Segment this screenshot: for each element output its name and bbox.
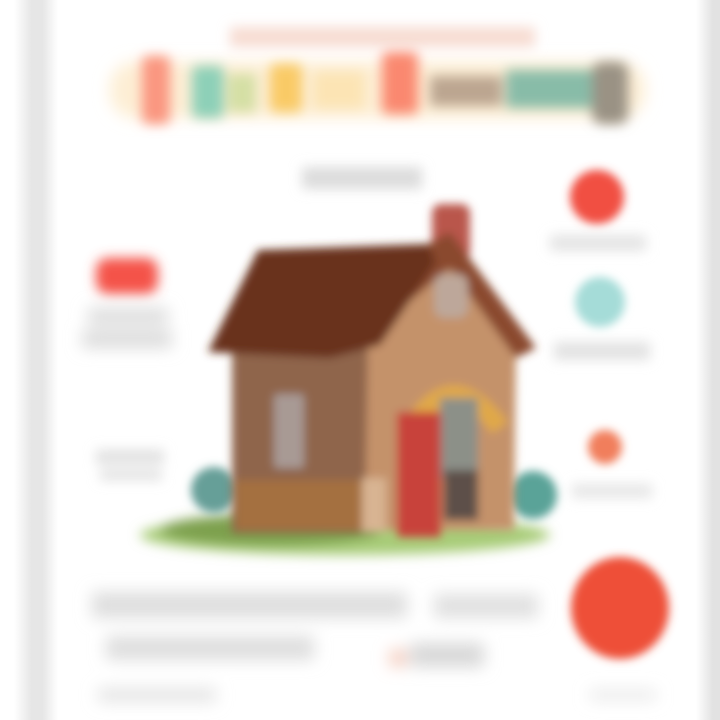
- orange icon: [588, 430, 622, 464]
- subtitle strip: [230, 27, 535, 47]
- bottom text block: [92, 592, 656, 702]
- house illustration: [140, 204, 557, 555]
- grass: [140, 514, 550, 555]
- title banner: [110, 27, 645, 124]
- pale step: [362, 478, 386, 532]
- callout text: [572, 484, 652, 498]
- title halo: [110, 62, 645, 118]
- callout: right middle: [554, 277, 650, 360]
- front wall: [365, 250, 516, 530]
- callout text: [554, 342, 650, 360]
- callout text: [82, 308, 172, 348]
- callout: right lower: [572, 430, 652, 498]
- lower wall warm patch: [236, 480, 370, 530]
- callout text: [550, 235, 646, 251]
- title letters: [142, 52, 628, 124]
- main roof: [208, 244, 436, 358]
- teal circle icon: [575, 277, 625, 327]
- side wall: [232, 345, 374, 533]
- right page edge strip: [696, 0, 720, 720]
- callout: right top: [550, 170, 646, 251]
- callout: left bottom text: [96, 450, 164, 480]
- bushes: [191, 467, 557, 519]
- door arch: [412, 395, 500, 428]
- large red badge: [571, 557, 669, 659]
- red badge: [96, 258, 158, 294]
- heading bar above house: [302, 167, 422, 189]
- side window: [274, 394, 304, 468]
- gable window: [434, 274, 468, 318]
- left page edge strip: [14, 0, 58, 720]
- front gable roof: [405, 232, 536, 358]
- chimney: [432, 204, 470, 260]
- red circle icon: [570, 170, 624, 224]
- red door: [397, 412, 441, 537]
- door glass: [440, 398, 478, 478]
- callout: left top: [82, 258, 172, 348]
